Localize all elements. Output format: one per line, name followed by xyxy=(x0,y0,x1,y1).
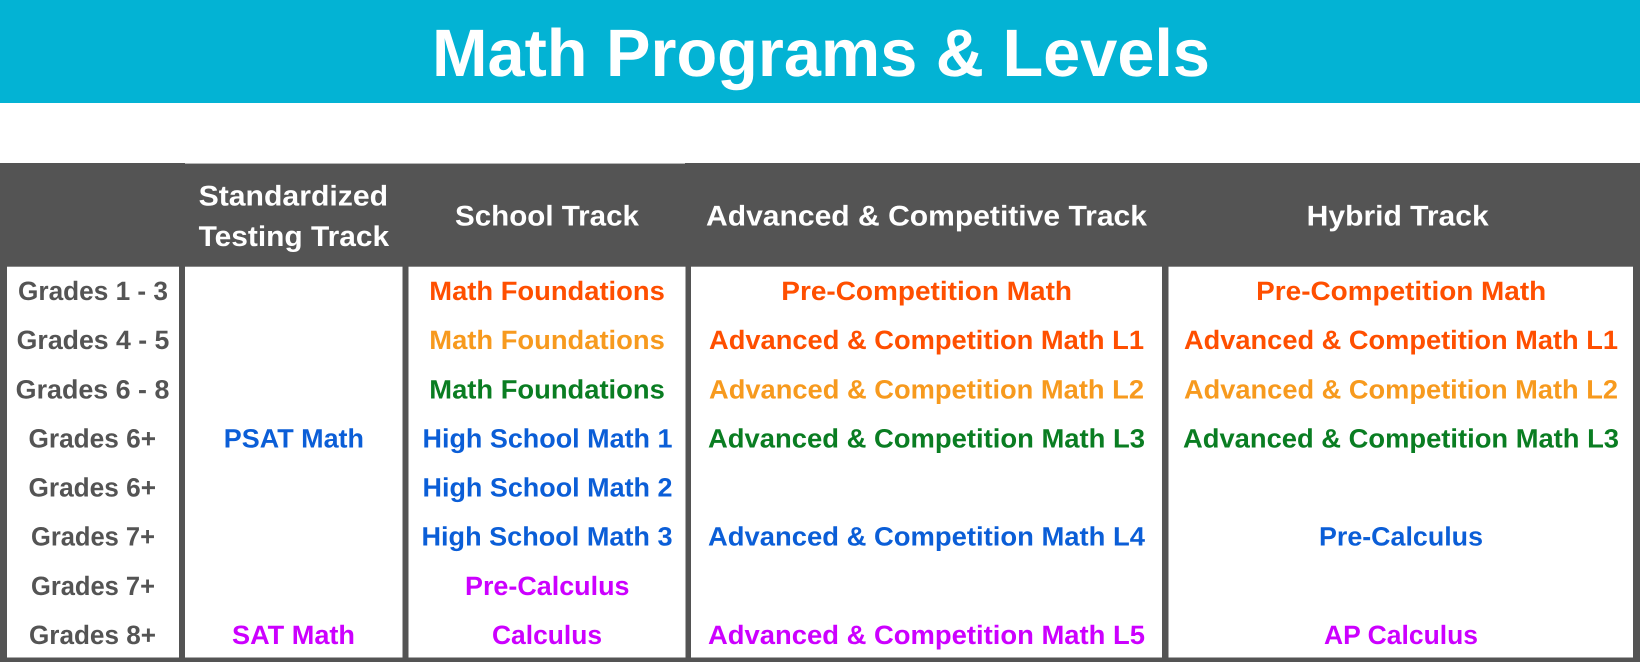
header: standardized testing track xyxy=(199,181,389,253)
column: standardized testing track: SAT Math xyxy=(232,620,355,650)
column: standardized testing track: PSAT Math xyxy=(224,423,364,453)
column: school track: Math Foundations xyxy=(429,276,665,306)
column: advanced and competitive track: Advanced & Competition Math L5 xyxy=(708,620,1145,650)
column: hybrid track: AP Calculus xyxy=(1324,620,1478,650)
column: grades: Grades 6+ xyxy=(28,423,156,453)
table xyxy=(0,163,1640,662)
column: school track: Math Foundations xyxy=(429,325,665,355)
column: grades: Grades 7+ xyxy=(31,522,155,552)
column: school track xyxy=(408,267,686,658)
column: standardized testing track xyxy=(185,267,402,658)
column: advanced and competitive track: Advanced & Competition Math L2 xyxy=(709,374,1144,404)
column: school track: High School Math 2 xyxy=(422,473,672,503)
column: school track: Calculus xyxy=(492,620,602,650)
header: standardized testing track: Standardized xyxy=(199,181,388,213)
column: school track: Math Foundations xyxy=(429,374,665,404)
column: hybrid track: Pre-Calculus xyxy=(1319,522,1483,552)
column: grades: Grades 4 - 5 xyxy=(17,325,169,355)
header: standardized testing track: Testing Track xyxy=(199,221,389,253)
column: grades: Grades 1 - 3 xyxy=(18,276,168,306)
column: advanced and competitive track: Advanced & Competition Math L1 xyxy=(709,325,1144,355)
title banner xyxy=(0,0,1640,103)
column: hybrid track: Advanced & Competition Math L2 xyxy=(1184,374,1618,404)
column: advanced and competitive track: Advanced & Competition Math L3 xyxy=(708,423,1145,453)
column: grades: Grades 6+ xyxy=(28,473,156,503)
column: school track: High School Math 3 xyxy=(422,522,672,552)
table header band xyxy=(0,163,1640,662)
column: hybrid track: Advanced & Competition Math L3 xyxy=(1183,423,1619,453)
column: grades xyxy=(7,267,179,658)
column: grades: Grades 8+ xyxy=(29,620,156,650)
column: hybrid track: Advanced & Competition Math L1 xyxy=(1184,325,1618,355)
column: advanced and competitive track: Pre-Competition Math xyxy=(781,276,1072,306)
column: advanced and competitive track xyxy=(691,267,1162,658)
title banner: Math Programs & Levels xyxy=(432,16,1210,91)
column: advanced and competitive track: Advanced & Competition Math L4 xyxy=(708,522,1145,552)
column: grades: Grades 7+ xyxy=(31,571,155,601)
column: grades: Grades 6 - 8 xyxy=(16,374,169,404)
header: school track: School Track xyxy=(455,201,639,233)
column: hybrid track xyxy=(1168,267,1633,658)
header: hybrid track: Hybrid Track xyxy=(1307,201,1489,233)
header: advanced and competitive track: Advanced & Competitive Track xyxy=(706,201,1147,233)
column: school track: Pre-Calculus xyxy=(465,571,630,601)
column: hybrid track: Pre-Competition Math xyxy=(1256,276,1546,306)
column: school track: High School Math 1 xyxy=(422,423,672,453)
